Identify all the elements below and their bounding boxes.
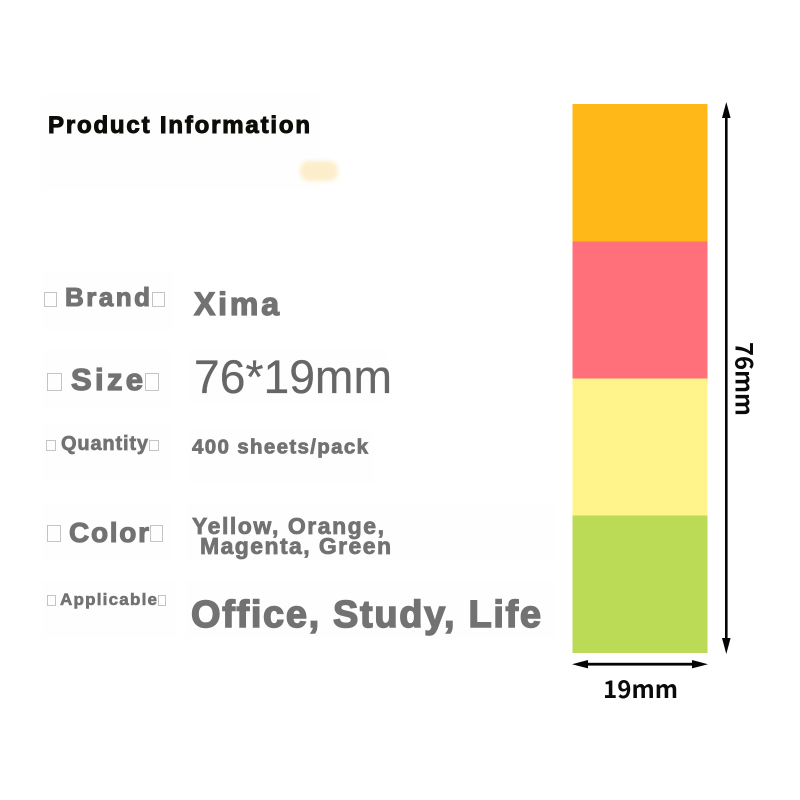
value: applicable: Office, Study, Life: [191, 594, 541, 636]
label: size: [48, 362, 158, 397]
label: size: Size: [71, 362, 143, 397]
label: height: 76mm: [728, 342, 762, 416]
value: quantity: 400 sheets/pack: [192, 436, 369, 458]
faint patches behind text: [41, 94, 556, 638]
label: color: Color: [69, 517, 149, 548]
row: size: [48, 350, 392, 403]
label: color: [48, 517, 162, 548]
label: quantity: Quantity: [61, 433, 149, 455]
yellow note: [572, 378, 708, 516]
arrow: width dimension: [572, 660, 708, 668]
orange note: [572, 104, 708, 242]
sticky note color strip: [572, 104, 708, 653]
decorative smudge: [300, 161, 338, 181]
label: brand: Brand: [65, 282, 150, 312]
arrow: height dimension: [722, 102, 731, 654]
value: brand: Xima: [194, 286, 279, 322]
row: brand: [44, 282, 279, 322]
row: quantity: [46, 433, 369, 458]
value: color: [192, 513, 391, 559]
value: size: 76*19mm: [194, 350, 392, 403]
magenta note: [572, 242, 708, 378]
row: applicable: [48, 590, 541, 636]
label: width: 19mm: [603, 671, 678, 706]
label: applicable: Applicable: [60, 590, 157, 609]
green note: [572, 516, 708, 653]
title: Product Information: [48, 112, 310, 139]
value: color: Magenta, Green: [200, 533, 391, 559]
row: color: [48, 513, 391, 559]
value: color: Yellow, Orange,: [192, 513, 384, 539]
